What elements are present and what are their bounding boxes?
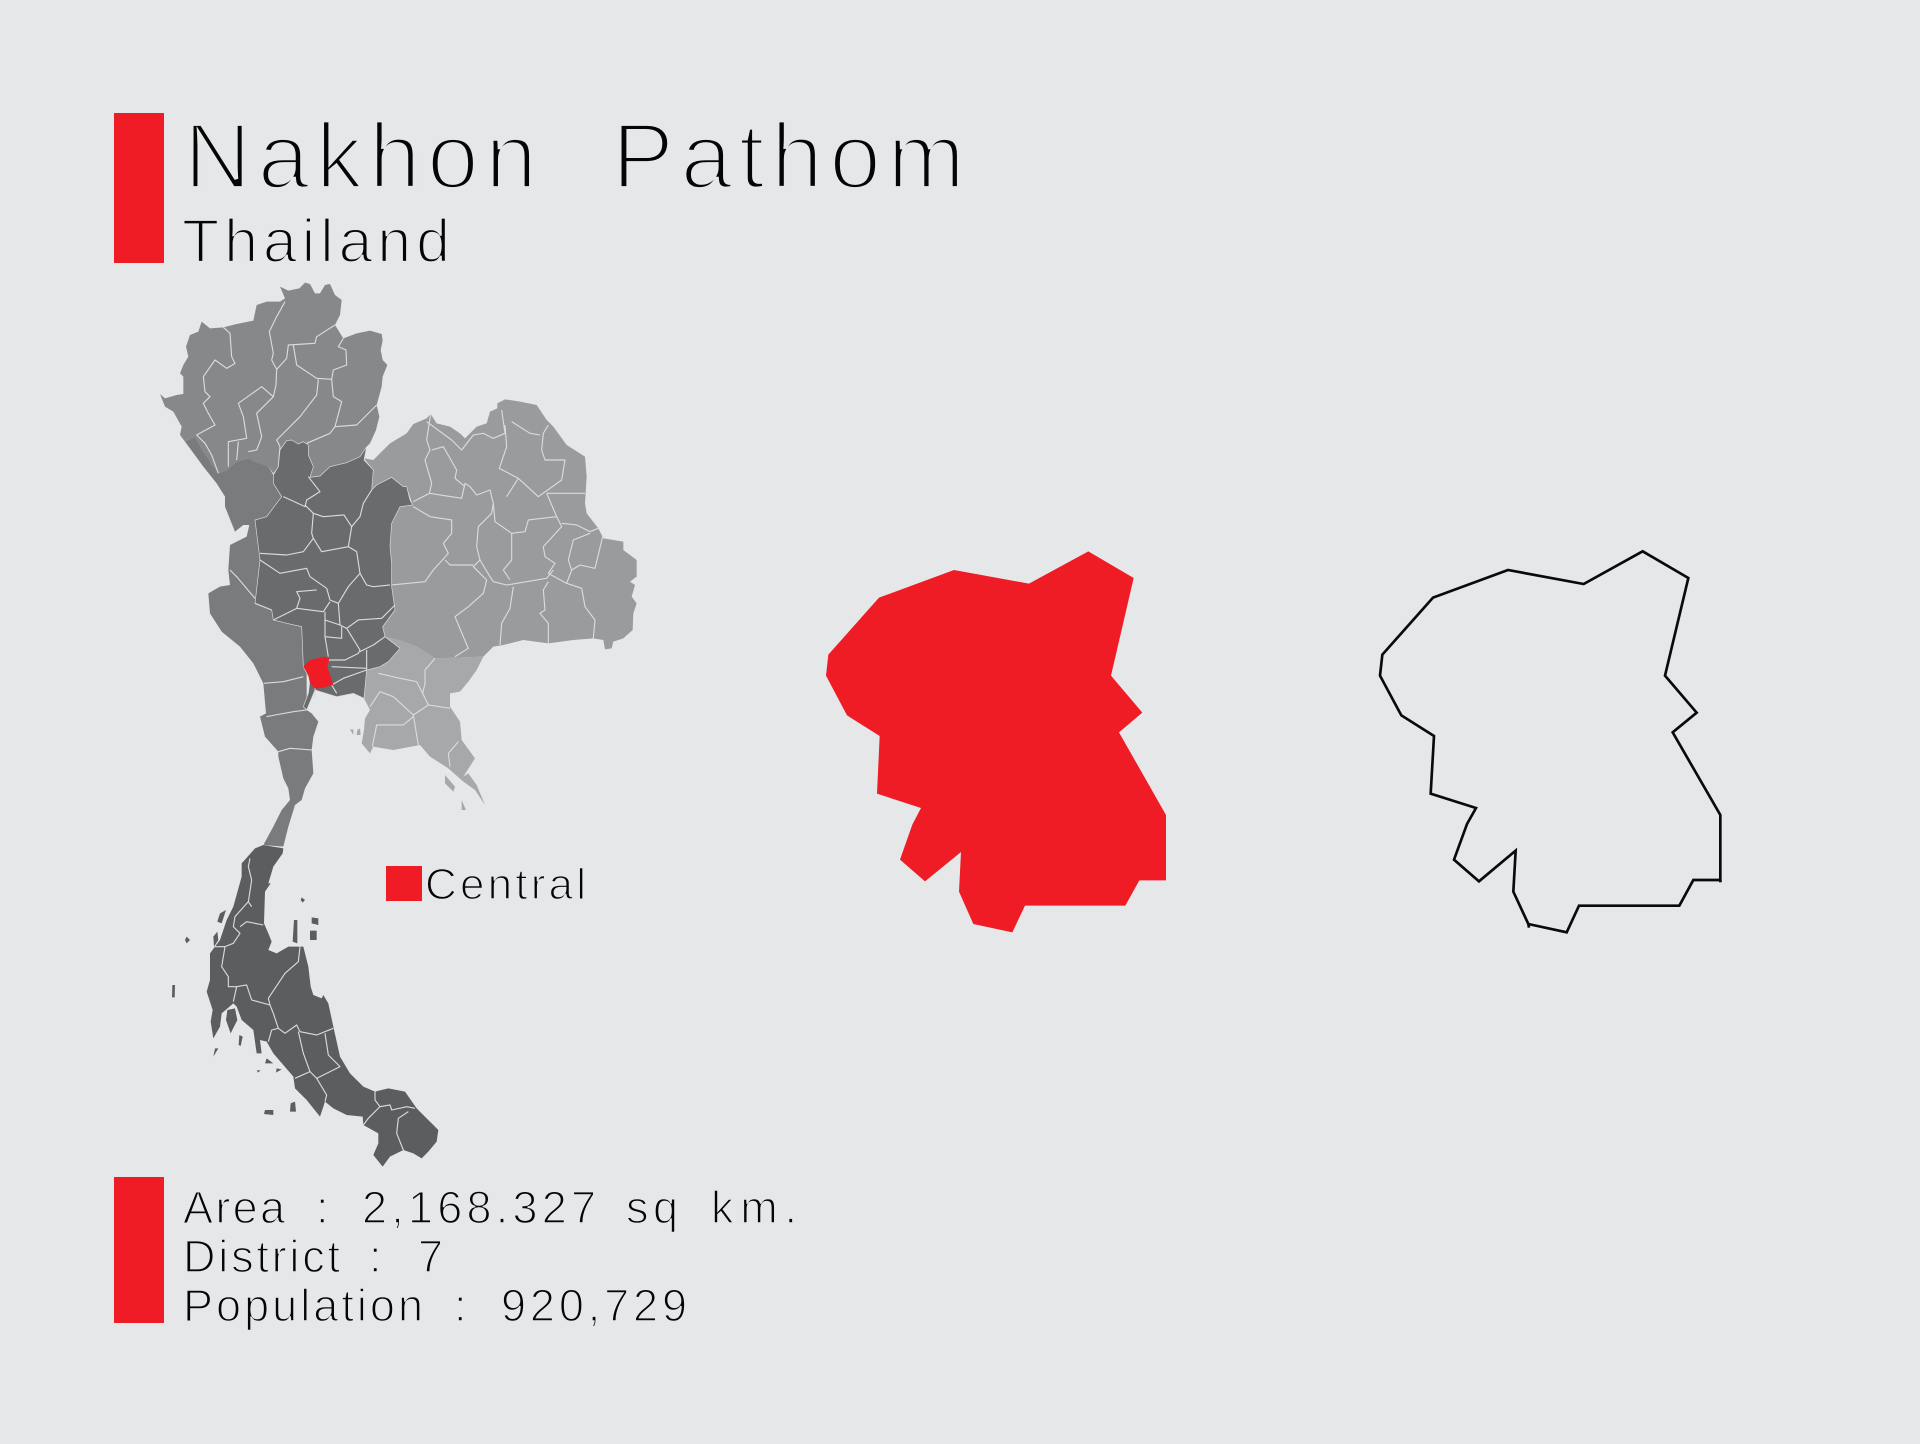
stats accent bar: [114, 1177, 164, 1323]
legend swatch: Central: [386, 866, 422, 901]
province shape: outline: [1380, 551, 1720, 932]
title: Nakhon Pathom: Nakhon: [184, 104, 537, 208]
title accent bar: [114, 113, 164, 263]
stat: population: 920,729: [501, 1280, 687, 1331]
stat: population: Population: [183, 1280, 423, 1331]
legend label: Central: Central: [425, 860, 586, 909]
stat: district: :: [369, 1231, 382, 1282]
region: south: [172, 845, 438, 1167]
stat: area: km.: [711, 1182, 797, 1233]
stat: district: 7: [418, 1231, 443, 1282]
map of Thailand by region: [160, 283, 637, 1167]
stat: area: :: [316, 1182, 329, 1233]
region: west: [185, 437, 318, 848]
region: north: [160, 283, 387, 477]
title: Nakhon Pathom: [184, 104, 965, 208]
province shape: red silhouette: [826, 551, 1166, 932]
stat: district: District: [183, 1231, 340, 1282]
highlighted province: Nakhon Pathom: [303, 657, 333, 688]
stat: area: Area: [183, 1182, 286, 1233]
title: Nakhon Pathom: Pathom: [612, 104, 965, 208]
stat: area: 2,168.327: [362, 1182, 596, 1233]
stat: population: :: [454, 1280, 467, 1331]
stat: district: [183, 1231, 443, 1282]
subtitle: Thailand: Thailand: [182, 207, 450, 275]
stat: area: sq: [626, 1182, 678, 1233]
region: northeast: [364, 399, 637, 658]
stat: area: [183, 1182, 797, 1233]
region: central: [255, 440, 413, 710]
stats text block: [183, 1182, 797, 1331]
region: east: [350, 637, 485, 810]
stat: population: [183, 1280, 687, 1331]
